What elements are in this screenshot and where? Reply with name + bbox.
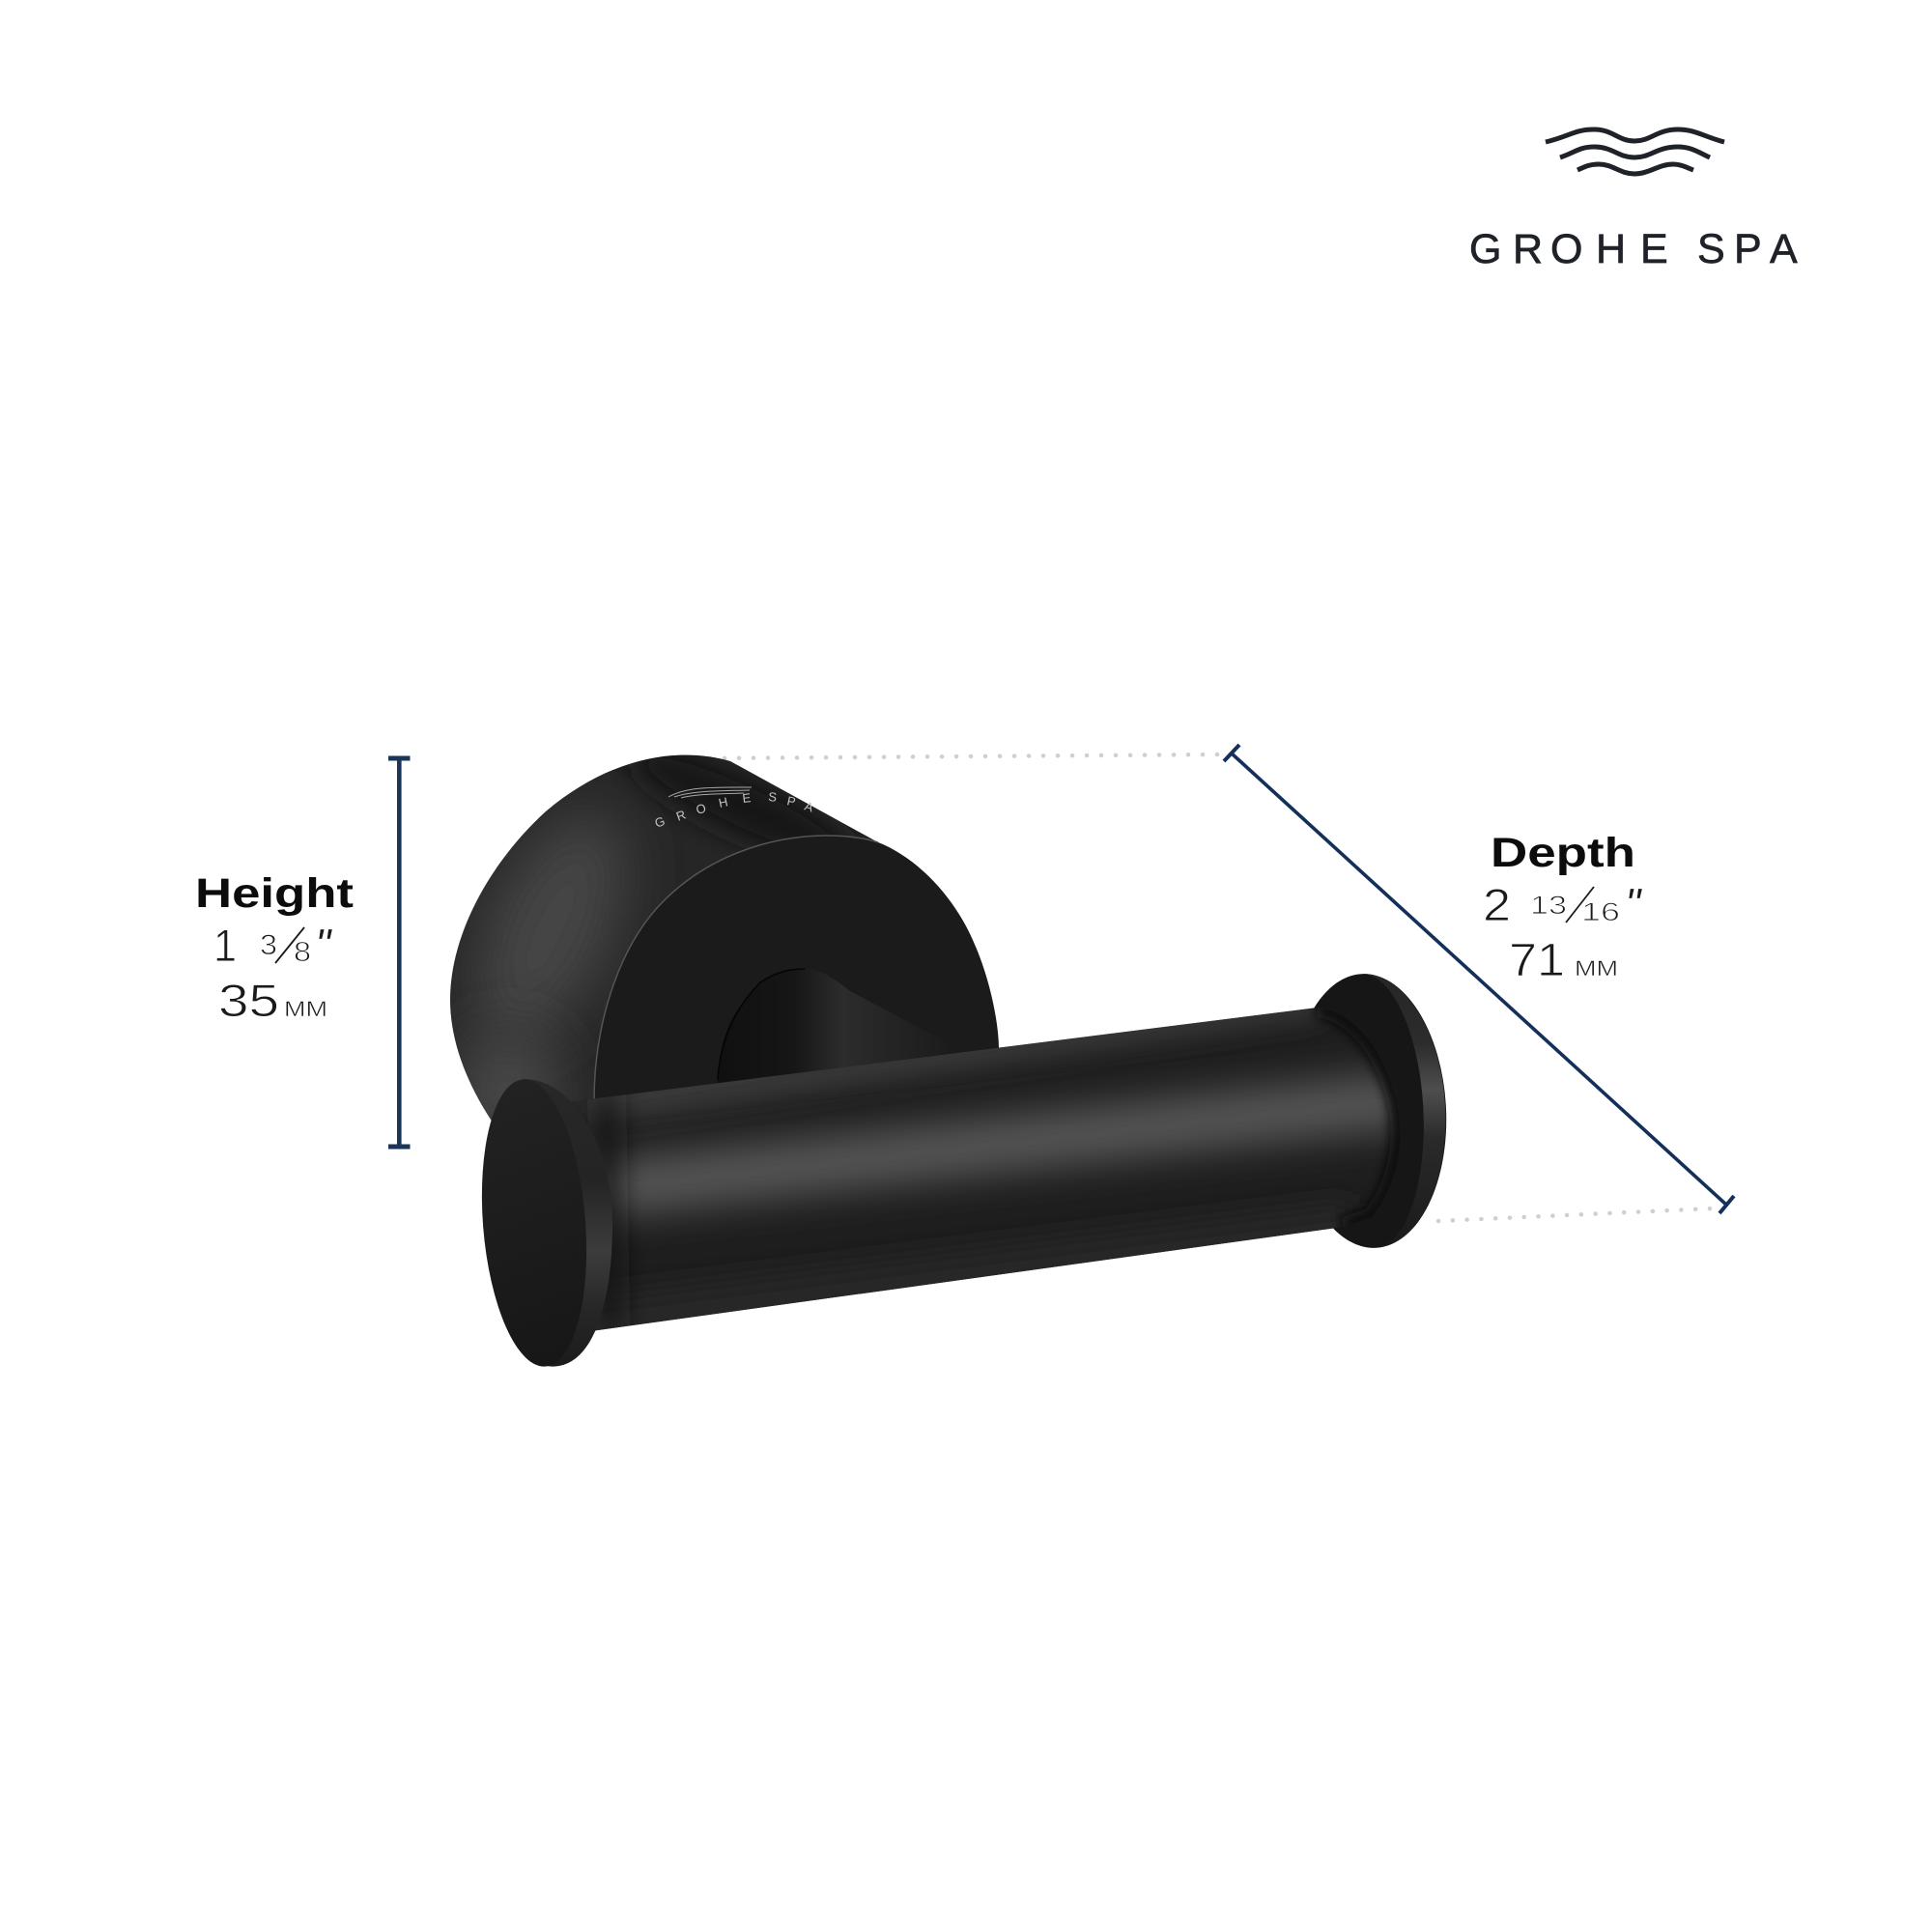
inches: 2 13/16: 13 [1530, 891, 1567, 920]
engraved brand mark on plate: GROHESPA [653, 789, 815, 831]
inches: 1 3/8: " [315, 920, 333, 970]
millimetres: 71 MM: MM [1575, 956, 1618, 980]
plate face rim highlight [594, 836, 878, 1101]
inches: 1 3/8: 3 [260, 929, 277, 961]
dotted guide: depth top [710, 754, 1225, 758]
depth label [1483, 830, 1643, 986]
inches: 1 3/8: 8 [294, 937, 311, 968]
inches: 2 13/16: " [1625, 879, 1643, 929]
inches: 1 3/8: 1 [213, 920, 237, 971]
inches: 2 13/16: 2 [1483, 879, 1511, 930]
inches: 1 3/8 [213, 920, 333, 971]
hook post and collar [718, 969, 963, 1087]
wordmark: GROHESPA [1469, 226, 1798, 272]
millimetres: 35 MM: 35 [218, 975, 279, 1026]
wall plate side [450, 755, 879, 1121]
millimetres: 35 MM: MM [284, 997, 327, 1021]
depth dimension line [1224, 745, 1734, 1213]
inches: 2 13/16: 16 [1581, 897, 1620, 926]
inches: 2 13/16 [1483, 879, 1643, 930]
height dimension bracket [388, 755, 410, 1150]
heading: Height: Height [195, 870, 354, 917]
millimetres: 71 MM: 71 [1509, 935, 1565, 986]
front cap rim [523, 1079, 612, 1367]
front cap face [471, 1075, 597, 1371]
height label [195, 870, 354, 1026]
icon: three waves [1546, 129, 1724, 174]
wall plate front face [594, 836, 999, 1150]
infographic canvas [199, 128, 1799, 1367]
hook barrel [572, 1008, 1399, 1331]
logo: GROHE SPA [1469, 129, 1798, 272]
heading: Depth: Depth [1491, 830, 1635, 876]
dotted guide: depth bottom [1438, 1208, 1712, 1221]
rear flange [1285, 970, 1453, 1252]
millimetres: 71 MM [1509, 935, 1618, 986]
millimetres: 35 MM [218, 975, 327, 1026]
product: matte black robe hook [440, 727, 1453, 1371]
